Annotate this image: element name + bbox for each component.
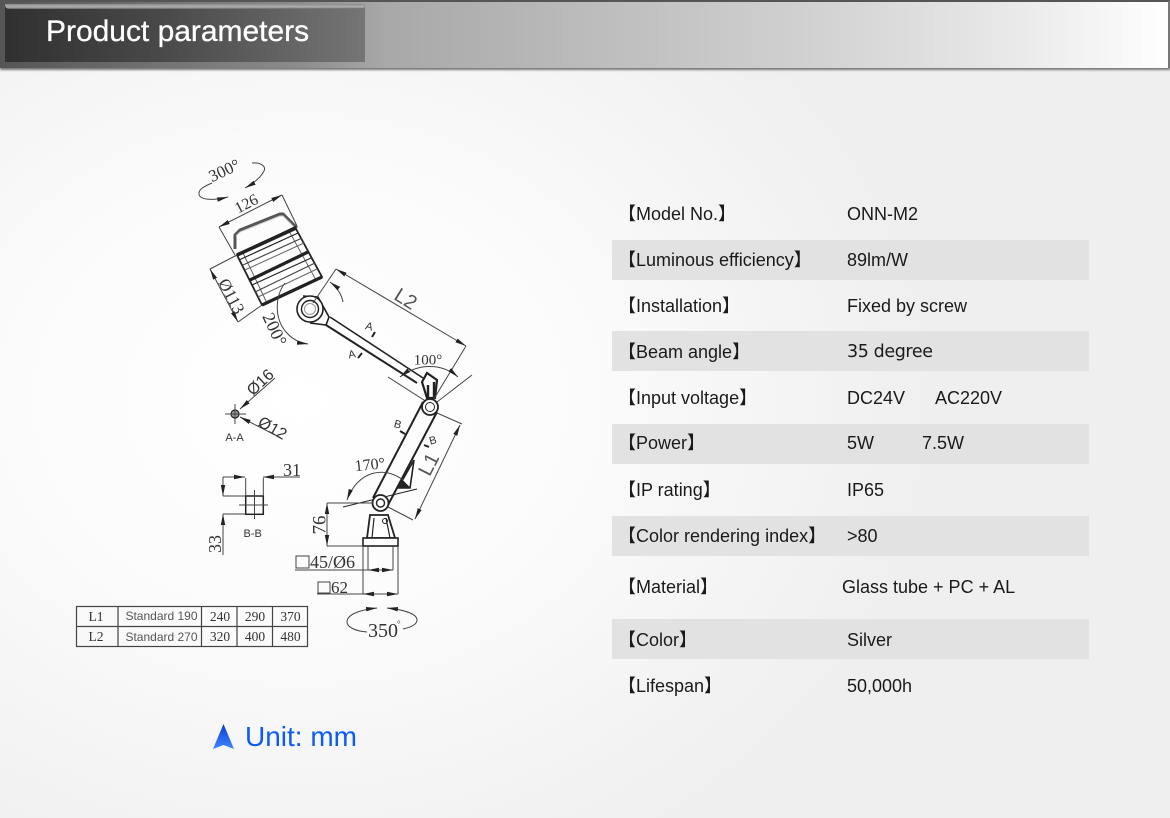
unit note — [213, 721, 357, 752]
lower arm and base — [343, 399, 438, 546]
row: lifespan: 【Lifespan】 — [618, 676, 722, 696]
parameter table: 5W — [847, 433, 874, 453]
row: material: 【Material】 — [618, 577, 718, 597]
upper arm labels: A — [364, 320, 375, 334]
technical drawing of lamp — [76, 155, 472, 648]
lower arm labels: 62 — [331, 578, 348, 597]
lower arm labels: B — [428, 434, 438, 448]
dimension table — [76, 606, 308, 647]
dimension table: 480 — [280, 629, 301, 644]
parameter table: IP65 — [847, 480, 884, 500]
upper arm labels — [347, 284, 442, 368]
dimension table: 370 — [280, 609, 301, 624]
dimension table: Standard 190 — [125, 609, 198, 623]
parameter table: DC24V — [847, 388, 905, 408]
section B-B — [205, 460, 301, 555]
section A-A: Ø12 — [255, 414, 290, 444]
dimension table: L2 — [88, 629, 104, 644]
dimension table: 320 — [210, 629, 230, 644]
parameter table: 35 degree — [847, 342, 933, 362]
lower arm labels: 45/Ø6 — [310, 552, 355, 572]
title: Product parameters — [46, 15, 309, 48]
lower arm labels: 76 — [309, 516, 330, 534]
row: voltage: 【Input voltage】 — [618, 388, 757, 408]
dimension table: Standard 270 — [125, 630, 198, 644]
parameter table: Glass tube + PC + AL — [842, 577, 1015, 597]
lower arm labels: 170° — [354, 455, 386, 475]
upper arm labels: 100° — [414, 352, 442, 368]
section B-B: B-B — [244, 528, 262, 540]
row: installation: 【Installation】 — [618, 296, 740, 316]
upper arm — [297, 296, 437, 398]
unit label: Unit: mm — [245, 721, 357, 752]
upper arm dimensions — [313, 269, 472, 407]
dimension table: 240 — [210, 609, 230, 624]
section B-B: 33 — [205, 535, 225, 553]
head labels: Ø113 — [214, 275, 249, 317]
row: efficiency: 【Luminous efficiency】 — [618, 250, 812, 270]
section B-B: 31 — [283, 460, 301, 480]
title panel — [5, 4, 365, 62]
parameter table: >80 — [847, 526, 878, 546]
section A-A: A-A — [225, 432, 244, 444]
lower arm labels — [309, 418, 444, 642]
row: model: 【Model No.】 — [618, 204, 736, 224]
row: beam angle: 【Beam angle】 — [618, 342, 750, 362]
parameter table: 50,000h — [847, 676, 912, 696]
row: power: 【Power】 — [618, 433, 705, 453]
head labels: 200° — [258, 309, 291, 349]
upper arm labels: A — [347, 348, 357, 361]
section A-A: Ø16 — [244, 366, 278, 399]
lower arm labels: L1 — [415, 450, 444, 480]
upper arm labels: L2 — [390, 284, 421, 315]
lower arm labels: ° — [397, 619, 401, 629]
parameter table: Fixed by screw — [847, 296, 967, 316]
section A-A — [225, 366, 290, 444]
lamp head — [235, 214, 322, 305]
head labels: 126 — [232, 191, 261, 217]
lower arm dimensions — [295, 413, 462, 632]
lower arm labels: B — [392, 418, 403, 432]
dimension table: 290 — [245, 609, 265, 624]
parameter table: 89lm/W — [847, 250, 908, 270]
lower arm labels: 350 — [368, 620, 398, 642]
dimension table: 400 — [245, 629, 265, 644]
dimension table: L1 — [88, 609, 104, 624]
header bar — [0, 0, 1170, 68]
parameter table: AC220V — [935, 388, 1002, 408]
row: IP rating: 【IP rating】 — [618, 480, 721, 500]
row: CRI: 【Color rendering index】 — [618, 526, 826, 546]
parameter table: Silver — [847, 630, 892, 650]
head labels — [206, 155, 291, 349]
head labels: 300° — [206, 155, 243, 186]
parameter table: 7.5W — [922, 433, 964, 453]
head dimensions — [199, 163, 343, 344]
row: color: 【Color】 — [618, 630, 697, 650]
icon: blue arrowhead — [213, 724, 234, 749]
parameter table: ONN-M2 — [847, 204, 918, 224]
